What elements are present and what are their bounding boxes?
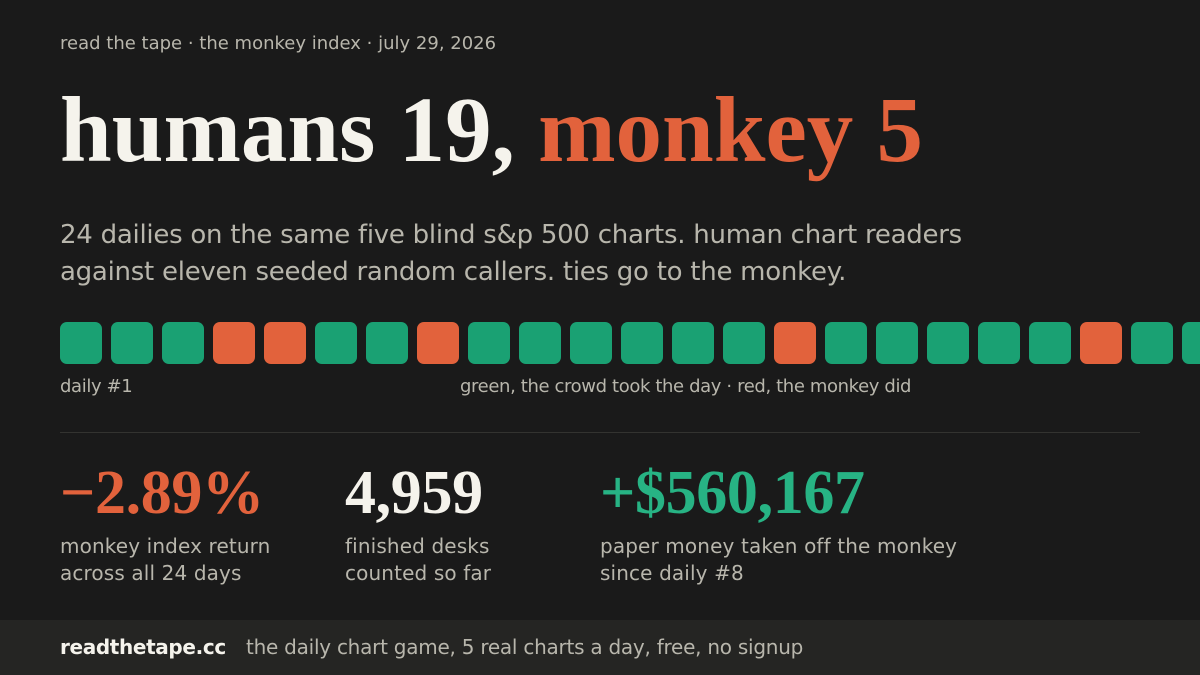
stat label: finished desks	[345, 534, 490, 558]
stat label: since daily #8	[600, 561, 744, 585]
stat: paper money	[600, 459, 957, 585]
footer brand: readthetape.cc	[60, 635, 226, 659]
eyebrow text: read the tape · the monkey index · july 29, 2026	[60, 33, 496, 54]
description: against eleven seeded random callers. ties go to the monkey.	[60, 257, 846, 287]
footer tagline: the daily chart game, 5 real charts a day, free, no signup	[246, 635, 803, 659]
stat label: paper money taken off the monkey	[600, 534, 957, 558]
daily results strip	[60, 322, 1200, 364]
stat: monkey index return	[60, 459, 270, 585]
footer bar	[0, 620, 1200, 675]
description: 24 dailies on the same five blind s&p 500 charts. human chart readers	[60, 220, 962, 250]
stat label: across all 24 days	[60, 561, 242, 585]
stat value: −2.89%	[60, 459, 264, 527]
stat label	[60, 534, 270, 585]
title: humans 19, monkey 5	[60, 79, 923, 182]
stat label	[600, 534, 957, 585]
stat label: monkey index return	[60, 534, 270, 558]
stat label: counted so far	[345, 561, 491, 585]
stat value: 4,959	[345, 459, 483, 527]
strip legend: green, the crowd took the day · red, the monkey did	[460, 376, 911, 397]
stat value: +$560,167	[600, 459, 865, 527]
stat label	[345, 534, 491, 585]
description	[60, 220, 962, 287]
stat: finished desks	[345, 459, 491, 585]
strip start label: daily #1	[60, 376, 132, 397]
